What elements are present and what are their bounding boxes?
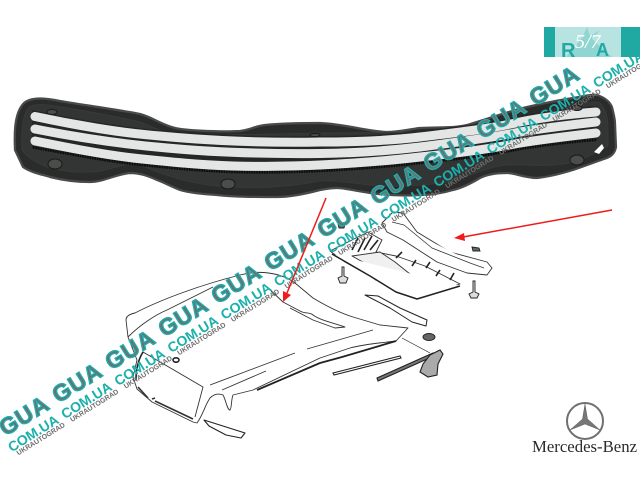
grommets: [47, 106, 584, 189]
seller logo badge: R: [561, 40, 576, 62]
Mercedes-Benz star logo: [567, 403, 603, 439]
arrow: to hood slot: [283, 198, 326, 302]
dark gap backing behind slats: [32, 106, 598, 173]
Mercedes-Benz wordmark: Mercedes-Benz: [532, 437, 637, 456]
watermark: GUA: GUA GUA GUA GUA GUA GUA GUA GUA GUA GUA GUA: [0, 60, 584, 441]
photo: grille part: [15, 95, 616, 197]
technical line drawing: hood: [126, 272, 408, 423]
seller logo badge: [544, 27, 640, 62]
end opening: [594, 144, 604, 154]
gas struts and hinge: [333, 338, 443, 381]
duct assembly: [330, 232, 460, 299]
seller logo badge: 5/7: [575, 31, 602, 53]
teeth strip: [33, 140, 596, 172]
watermark: UKRAUTOGRAD: UKRAUTOGRAD UKRAUTOGRAD UKRAUTOGRAD UKRAUTOGRAD UKRAUTOGRAD UKRAUTOGRAD UKRAUTOGRAD UKRAUTOGRAD UKRAUTOGRAD UKRAUTOGRAD UKRAUTOGRAD UKRAUTOGRAD: [16, 55, 640, 457]
slats: [35, 112, 596, 166]
arrow: to upper bracket: [454, 210, 612, 241]
side bracket: [365, 295, 427, 326]
watermark: COM.UA: COM.UA COM.UA COM.UA COM.UA COM.UA COM.UA COM.UA COM.UA COM.UA COM.UA COM.UA COM.UA: [5, 47, 640, 455]
clips and screws: [338, 224, 480, 340]
small trim piece: [204, 420, 245, 438]
seller logo badge: A: [596, 40, 609, 60]
upper bracket: [382, 212, 492, 275]
